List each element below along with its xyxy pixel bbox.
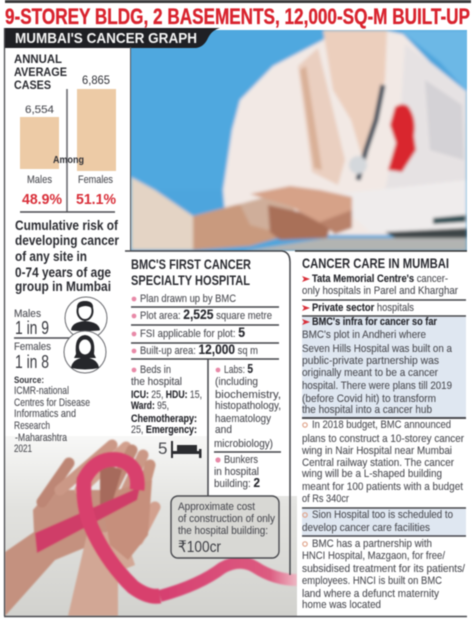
source note: ICMR-national xyxy=(14,385,69,397)
fact: built-up area: Built-up area: 12,000 sq m xyxy=(140,341,258,357)
source note: 2021 xyxy=(14,443,32,455)
bar: males xyxy=(20,117,59,169)
callout: approximate cost xyxy=(171,496,279,558)
photo: hands holding pink ribbon xyxy=(5,436,297,616)
chart heading: ANNUAL xyxy=(14,52,62,66)
item: BMC's infra so far: BMC's infra for cancer so far xyxy=(312,316,438,328)
source note: Research xyxy=(14,420,50,432)
percent: males: 48.9% xyxy=(22,191,62,208)
fact: labs: (including xyxy=(215,376,258,388)
item: 2018 budget xyxy=(301,419,464,505)
cumulative risk heading: 0-74 years of age xyxy=(15,264,111,280)
fact: labs: and xyxy=(215,424,232,436)
item: 2018 budget: wing will be a L-shaped building xyxy=(301,468,442,480)
source note: Source: xyxy=(14,375,44,386)
cumulative risk heading: group in Mumbai xyxy=(15,278,111,294)
icon: bed xyxy=(171,441,202,458)
fact: labs: haematology xyxy=(215,413,271,425)
value: males: 6,554 xyxy=(25,104,54,116)
item: BMC's infra so far: originally meant to be a cancer xyxy=(302,367,438,379)
fact: labs: microbiology) xyxy=(214,438,273,450)
item: BMC's infra so far: public-private partnership was xyxy=(302,355,439,367)
fact: labs: biochemistry, xyxy=(215,389,281,401)
fact: plan: Plan drawn up by BMC xyxy=(140,293,236,305)
cumulative risk heading xyxy=(15,217,119,294)
fact: plot area: Plot area: 2,525 square metre xyxy=(140,306,272,322)
cumulative risk heading: Cumulative risk of xyxy=(15,217,118,233)
item: BMC's infra so far: (before Covid hit) to transform xyxy=(302,393,436,405)
fact: bunkers: building: 2 xyxy=(214,475,260,490)
fact: labs: histopathology, xyxy=(215,400,281,412)
fact: beds xyxy=(131,364,202,458)
item: HNCI partnership: employees. HNCI is built on BMC xyxy=(302,575,442,587)
icon: female avatar xyxy=(64,331,106,373)
item: Sion Hospital xyxy=(302,509,466,536)
item: 2018 budget: of Rs 340cr xyxy=(302,493,349,505)
value: females: 6,865 xyxy=(82,73,110,87)
item: BMC's infra so far: the hospital into a cancer hub xyxy=(302,404,432,416)
risk: females 1 in 8: 1 in 8 xyxy=(15,352,49,372)
label: males: Males xyxy=(27,174,52,186)
fact: FSI: FSI applicable for plot: 5 xyxy=(140,324,245,340)
source note: -Maharashtra xyxy=(15,432,68,444)
item: Sion Hospital: develop cancer care facilities xyxy=(302,522,430,534)
item: HNCI partnership: HNCI Hospital, Mazgaon, for free/ xyxy=(302,550,446,562)
source note: Centres for Disease xyxy=(14,397,90,409)
risk: males 1 in 9: Males xyxy=(14,308,41,320)
fact: bunkers: Bunkers xyxy=(224,454,258,466)
risk: males 1 in 9: 1 in 9 xyxy=(15,318,49,338)
item: 2018 budget: wing in Nair Hospital near Mumbai xyxy=(301,445,452,457)
icon: male avatar xyxy=(65,297,107,339)
fact: bunkers: in hospital xyxy=(214,466,259,478)
item: HNCI partnership: subsidised treatment for its patients/ xyxy=(302,563,466,575)
fact: labs: Labs: 5 xyxy=(224,361,253,376)
photo: doctor holding patient's hands xyxy=(131,30,470,251)
header tab: Mumbai's cancer graph: MUMBAI'S CANCER GRAPH xyxy=(15,30,197,47)
panel: annual average cases chart xyxy=(14,52,116,212)
risk: females 1 in 8 xyxy=(14,341,51,372)
item: HNCI partnership: BMC has a partnership with xyxy=(312,538,432,550)
item: HNCI partnership: home was located xyxy=(302,599,381,611)
fact: beds: Ward: 95, xyxy=(131,400,169,412)
item: Tata Memorial xyxy=(302,273,458,297)
source note xyxy=(14,375,90,455)
chart heading xyxy=(14,52,67,92)
fact: beds: 5 xyxy=(158,439,167,458)
item: private sector: Private sector hospitals xyxy=(312,302,414,314)
item: Tata Memorial: only hospitals in Parel and Kharghar xyxy=(302,285,458,297)
risk: males 1 in 9 xyxy=(14,308,49,338)
item: HNCI partnership: land where a defunct maternity xyxy=(302,588,439,600)
cumulative risk heading: developing cancer xyxy=(15,232,119,248)
chart heading: CASES xyxy=(14,78,51,92)
item: 2018 budget: Central railway station. The cancer xyxy=(302,457,454,469)
fact: labs xyxy=(214,361,281,450)
item: Tata Memorial: Tata Memorial Centre's cancer- xyxy=(312,273,448,285)
source note: Informatics and xyxy=(14,408,76,420)
item: BMC's infra so far xyxy=(302,316,466,418)
item: Sion Hospital: Sion Hospital too is scheduled to xyxy=(312,509,453,521)
item: BMC's infra so far: BMC's plot in Andheri where xyxy=(302,329,426,341)
panel heading xyxy=(131,256,251,288)
item: 2018 budget: In 2018 budget, BMC announced xyxy=(312,419,451,431)
percent: females: 51.1% xyxy=(76,191,116,208)
label: females: Females xyxy=(78,174,113,186)
chart heading: AVERAGE xyxy=(14,65,67,79)
among label: Among xyxy=(53,155,84,166)
panel heading: BMC'S FIRST CANCER xyxy=(131,256,251,272)
fact: beds: Beds in xyxy=(140,364,171,376)
cumulative risk heading: of any site in xyxy=(15,248,87,264)
callout: approximate cost: ₹100cr xyxy=(178,539,222,556)
item: BMC's infra so far: Seven Hills Hospital was built on a xyxy=(302,343,453,355)
fact: beds: ICU: 25, HDU: 15, xyxy=(131,389,202,401)
fact: bunkers xyxy=(214,454,260,490)
panel: left column background xyxy=(5,47,130,437)
panel heading: SPECIALTY HOSPITAL xyxy=(131,272,250,288)
item: BMC's infra so far: hospital. There were plans till 2019 xyxy=(302,380,452,392)
fact: beds: the hospital xyxy=(131,376,182,388)
fact: beds: 25, Emergency: xyxy=(131,424,197,436)
bar: females xyxy=(77,89,116,171)
callout: approximate cost: the hospital building: xyxy=(178,525,268,537)
callout: approximate cost: Approximate cost xyxy=(178,501,255,513)
fact: beds: Chemotherapy: xyxy=(131,413,197,425)
callout: approximate cost: of construction of only xyxy=(178,513,275,525)
risk: females 1 in 8: Females xyxy=(14,341,51,353)
panel: cancer care in Mumbai xyxy=(295,251,467,611)
panel: BMC's first cancer specialty hospital xyxy=(125,251,290,575)
item: HNCI partnership xyxy=(302,538,466,611)
